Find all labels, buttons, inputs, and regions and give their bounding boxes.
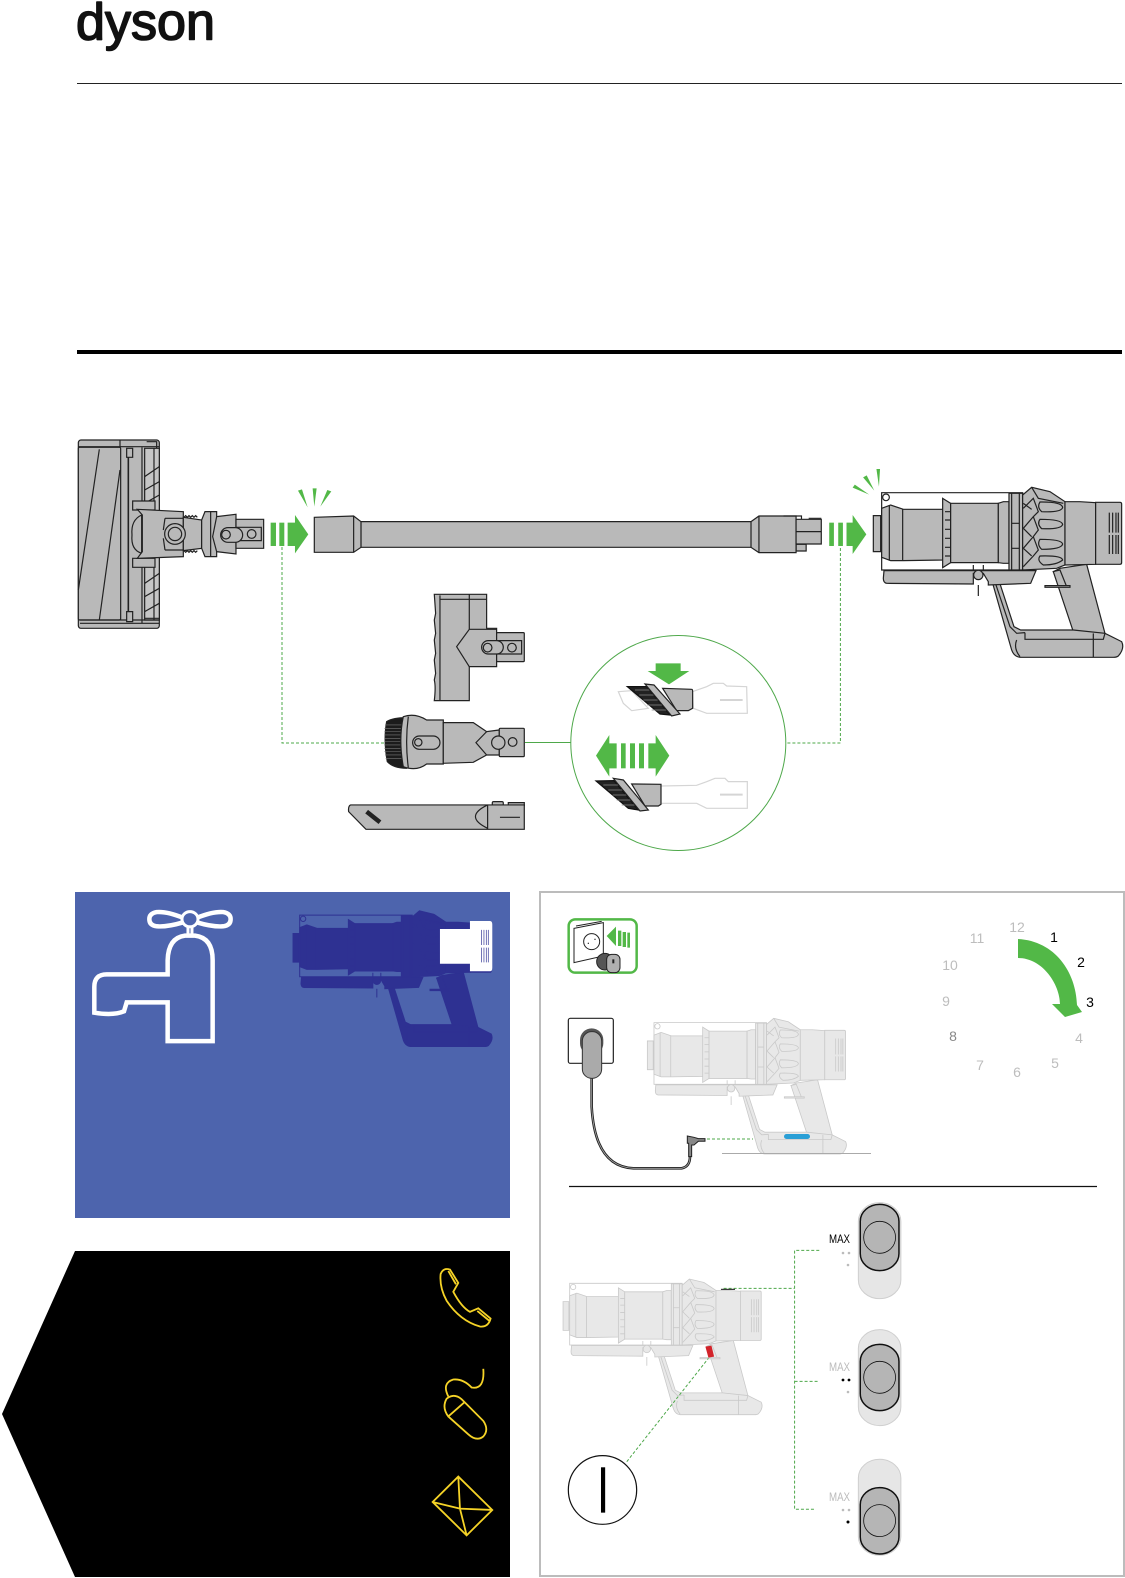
green down arrow bbox=[648, 663, 689, 684]
floor head bbox=[78, 440, 159, 628]
icon: envelope bbox=[433, 1477, 492, 1535]
wand bbox=[314, 516, 755, 552]
panel: charging and modes bbox=[540, 892, 1124, 1576]
charge time dial: 3 bbox=[1086, 994, 1094, 1010]
assembly diagram: floor head, wand and tools bbox=[78, 440, 755, 829]
charge time dial: 5 bbox=[1051, 1055, 1059, 1071]
ghost vacuum modes bbox=[563, 1279, 762, 1415]
switch: eco bbox=[858, 1459, 901, 1555]
mode dots bbox=[842, 1252, 850, 1524]
charge time dial: 9 bbox=[942, 993, 950, 1009]
charging light bbox=[784, 1134, 810, 1139]
tools: combination brush bbox=[384, 715, 524, 769]
attachment detail upper bbox=[618, 683, 747, 716]
charge time dial: 7 bbox=[976, 1057, 984, 1073]
mode labels bbox=[829, 1234, 850, 1504]
ghost vacuum charging bbox=[647, 1018, 846, 1154]
surface line bbox=[722, 1152, 871, 1154]
charge time dial: 12 bbox=[1009, 919, 1025, 935]
tools: crevice tool bbox=[349, 802, 524, 829]
icon: mouse bbox=[444, 1369, 486, 1439]
panel: contact bbox=[2, 1251, 510, 1577]
icon: plug in bbox=[569, 919, 637, 973]
swivel joint bbox=[132, 509, 264, 558]
mode labels: MAX bbox=[829, 1362, 850, 1374]
divider bbox=[569, 1186, 1097, 1188]
icon: tap bbox=[94, 912, 231, 1041]
power symbol circle bbox=[568, 1456, 637, 1524]
switch: MAX bbox=[858, 1203, 901, 1299]
dashed connector lines bbox=[282, 547, 840, 743]
green arrow left bbox=[271, 515, 308, 553]
green arrow right bbox=[829, 515, 866, 554]
charging dashed line bbox=[707, 1138, 753, 1140]
icon: phone bbox=[440, 1269, 491, 1327]
green double arrow bbox=[596, 735, 669, 777]
charge time dial: 4 bbox=[1075, 1030, 1083, 1046]
red trigger bbox=[705, 1346, 714, 1358]
charge time dial: 10 bbox=[942, 957, 958, 973]
charge time dial: 2 bbox=[1077, 954, 1085, 970]
charge time dial bbox=[942, 919, 1094, 1080]
vacuum silhouette bbox=[293, 911, 492, 1046]
wand connector bbox=[751, 516, 821, 553]
attachment detail lower bbox=[596, 778, 747, 811]
click sparks right bbox=[853, 469, 880, 495]
charge time dial: 8 bbox=[949, 1028, 957, 1044]
solid connector bbox=[525, 742, 571, 744]
charge time dial: 11 bbox=[970, 930, 984, 946]
charge time dial: 6 bbox=[1013, 1064, 1021, 1080]
mode labels: MAX bbox=[829, 1234, 850, 1246]
power button mark bbox=[721, 1288, 735, 1291]
top rule bbox=[77, 83, 1122, 84]
wall socket and charger bbox=[568, 1018, 705, 1168]
detail circle bbox=[571, 636, 786, 850]
switch: medium bbox=[858, 1330, 901, 1426]
panel: wash filter bbox=[75, 892, 510, 1218]
dial arrow bbox=[1018, 939, 1082, 1017]
white filter cap bbox=[440, 921, 492, 971]
click sparks left bbox=[298, 488, 331, 507]
charge time dial: 1 bbox=[1050, 929, 1058, 945]
mode labels: MAX bbox=[829, 1492, 850, 1504]
mode connector lines bbox=[627, 1250, 819, 1509]
vacuum body bbox=[873, 487, 1123, 657]
tools: turbo tool bbox=[434, 594, 524, 701]
heavy section rule bbox=[77, 350, 1122, 354]
